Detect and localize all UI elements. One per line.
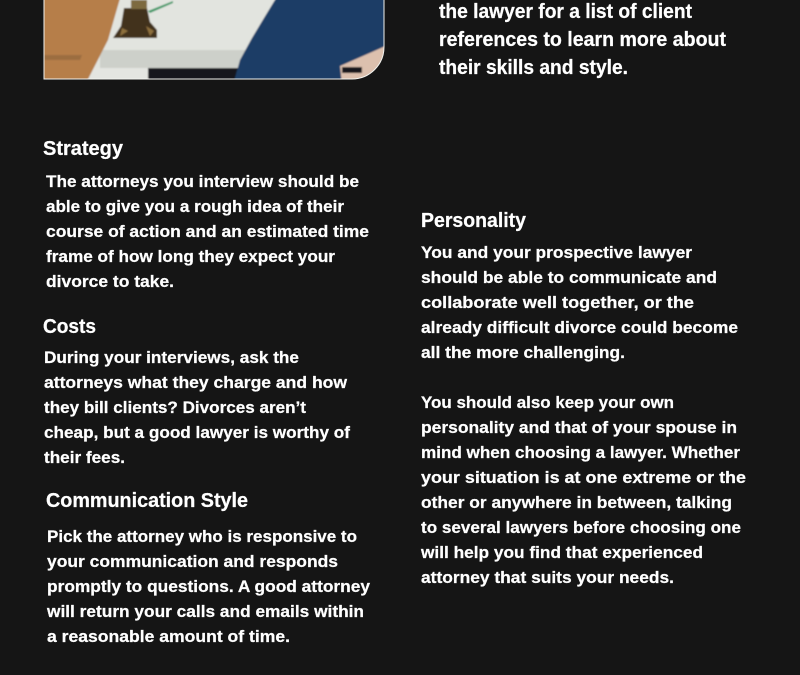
text block: personality paragraph two — [420, 393, 746, 587]
text block: personality paragraph two: attorney that suits your needs. — [421, 568, 674, 587]
heading: Strategy: Strategy — [43, 138, 124, 160]
text block: personality paragraph two: mind when choosing a lawyer. Whether — [421, 443, 740, 462]
photo: meeting at a table — [40, 0, 390, 85]
text block: strategy: frame of how long they expect your — [46, 247, 335, 266]
text block: personality paragraph one: collaborate well together, or the — [421, 293, 694, 312]
text block: communication style: a reasonable amount of time. — [47, 627, 290, 646]
text block: strategy: course of action and an estimated time — [46, 222, 369, 241]
text block: personality paragraph one: all the more challenging. — [421, 343, 625, 362]
text block: personality paragraph two: You should also keep your own — [421, 393, 674, 412]
text block: strategy: The attorneys you interview should be — [46, 172, 359, 191]
text block: personality paragraph two: to several lawyers before choosing one — [421, 518, 741, 537]
text block: costs: their fees. — [44, 448, 125, 467]
text block: strategy — [46, 172, 369, 291]
text block: personality paragraph two: personality and that of your spouse in — [421, 418, 737, 437]
text block: costs: cheap, but a good lawyer is worthy of — [44, 423, 350, 442]
text block: communication style: your communication and responds — [47, 552, 338, 571]
text block: client references: the lawyer for a list of client — [439, 1, 692, 23]
text block: personality paragraph two: will help you find that experienced — [420, 543, 703, 562]
text block: costs: During your interviews, ask the — [44, 348, 299, 367]
text block: communication style — [46, 527, 371, 646]
text block: costs: they bill clients? Divorces aren’t — [44, 398, 306, 417]
text block: communication style: promptly to questions. A good attorney — [47, 577, 371, 596]
text block: costs — [44, 348, 350, 467]
text block: personality paragraph two: your situation is at one extreme or the — [421, 468, 746, 487]
text block: strategy: divorce to take. — [46, 272, 174, 291]
text block: personality paragraph one: should be able to communicate and — [421, 268, 717, 287]
text block: costs: attorneys what they charge and how — [44, 373, 348, 392]
text block: client references — [439, 1, 726, 79]
heading: Costs: Costs — [43, 316, 96, 338]
text block: client references: their skills and style. — [439, 57, 628, 79]
text block: communication style: will return your calls and emails within — [46, 602, 364, 621]
text block: personality paragraph one: already difficult divorce could become — [421, 318, 738, 337]
text block: personality paragraph two: other or anywhere in between, talking — [421, 493, 732, 512]
text block: communication style: Pick the attorney who is responsive to — [47, 527, 357, 546]
text block: client references: references to learn more about — [439, 29, 726, 51]
text block: personality paragraph one: You and your prospective lawyer — [421, 243, 692, 262]
heading: Personality: Personality — [421, 210, 527, 232]
heading: Communication Style: Communication Style — [46, 490, 248, 512]
text block: strategy: able to give you a rough idea of their — [46, 197, 344, 216]
text block: personality paragraph one — [421, 243, 738, 362]
